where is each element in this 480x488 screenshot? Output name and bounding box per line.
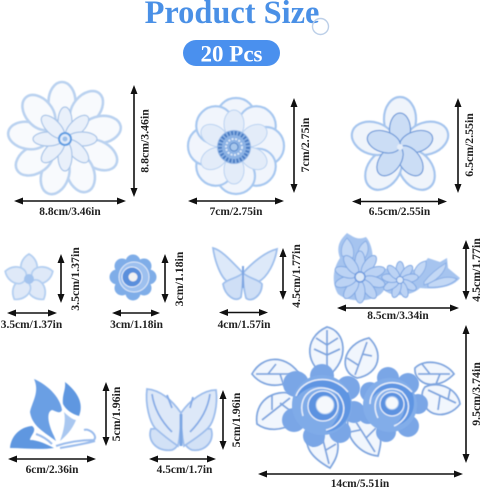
label: width: 4cm/1.57in	[218, 319, 271, 331]
arrow: height	[462, 240, 470, 300]
arrow: width	[8, 456, 96, 462]
arrow: height	[102, 382, 110, 446]
arrow: width	[188, 198, 284, 204]
item: 6cm butterfly	[8, 379, 123, 476]
arrow: width	[219, 309, 268, 316]
arrow: width	[7, 310, 57, 316]
icon: floral spray	[334, 233, 460, 303]
label: height: 3.5cm/1.37in	[68, 247, 82, 311]
item: 3cm flower	[110, 251, 186, 331]
badge: 20 Pcs: 20 Pcs	[201, 42, 263, 66]
icon: left rose	[282, 364, 365, 447]
arrow: width	[149, 456, 216, 462]
label: height: 6.5cm/2.55in	[462, 113, 476, 177]
arrow: height	[220, 390, 226, 450]
arrow: height	[290, 98, 298, 193]
arrow: height	[280, 248, 286, 300]
label: width: 3cm/1.18in	[110, 319, 164, 331]
arrow: height	[162, 254, 168, 303]
badge: 20 Pcs	[183, 40, 280, 66]
item: 4cm butterfly	[213, 244, 303, 331]
label: height: 4.5cm/1.77in	[289, 244, 303, 308]
label: height: 8.8cm/3.46in	[138, 109, 152, 173]
item: 3.5cm flower	[1, 247, 82, 331]
icon: small five-petal flower	[3, 254, 55, 304]
label: width: 7cm/2.75in	[210, 206, 263, 218]
item: 14cm rose applique	[252, 325, 480, 488]
arrow: height	[462, 325, 470, 463]
label: width: 8.5cm/3.34in	[367, 310, 429, 322]
label: height: 7cm/2.75in	[298, 117, 312, 172]
label: width: 8.8cm/3.46in	[39, 206, 101, 218]
arrow: height	[130, 85, 138, 197]
arrow: height	[58, 254, 64, 303]
label: width: 6cm/2.36in	[26, 464, 79, 476]
label: height: 5cm/1.96in	[229, 392, 243, 447]
icon: striped butterfly	[147, 389, 217, 450]
item: 7cm flower	[188, 98, 312, 218]
icon: blue side butterfly	[10, 379, 95, 449]
icon: double five-petal flower	[348, 97, 452, 197]
item: 4.5cm butterfly	[147, 389, 243, 476]
item: 8.5cm floral spray	[334, 233, 480, 322]
icon: right rose	[358, 367, 428, 442]
label: width: 4.5cm/1.7in	[157, 464, 213, 476]
icon: blue flower with pearl	[110, 254, 156, 300]
arrow: width	[258, 470, 463, 478]
item: 8.8cm flower	[6, 82, 152, 218]
icon: anemone flower	[188, 98, 284, 194]
label: height: 5cm/1.96in	[109, 386, 123, 441]
label: width: 3.5cm/1.37in	[1, 319, 63, 331]
item: 6.5cm flower	[348, 97, 476, 218]
label: height: 3cm/1.18in	[172, 251, 186, 306]
arrow: width	[14, 198, 126, 204]
icon: leaves	[252, 327, 460, 468]
icon: open petal flower	[6, 82, 123, 198]
arrow: width	[352, 198, 447, 205]
arrow: width	[112, 310, 160, 316]
arrow: width	[337, 304, 459, 312]
label: width: 6.5cm/2.55in	[369, 206, 431, 218]
arrow: height	[454, 98, 462, 193]
icon: sheer butterfly	[213, 248, 277, 300]
